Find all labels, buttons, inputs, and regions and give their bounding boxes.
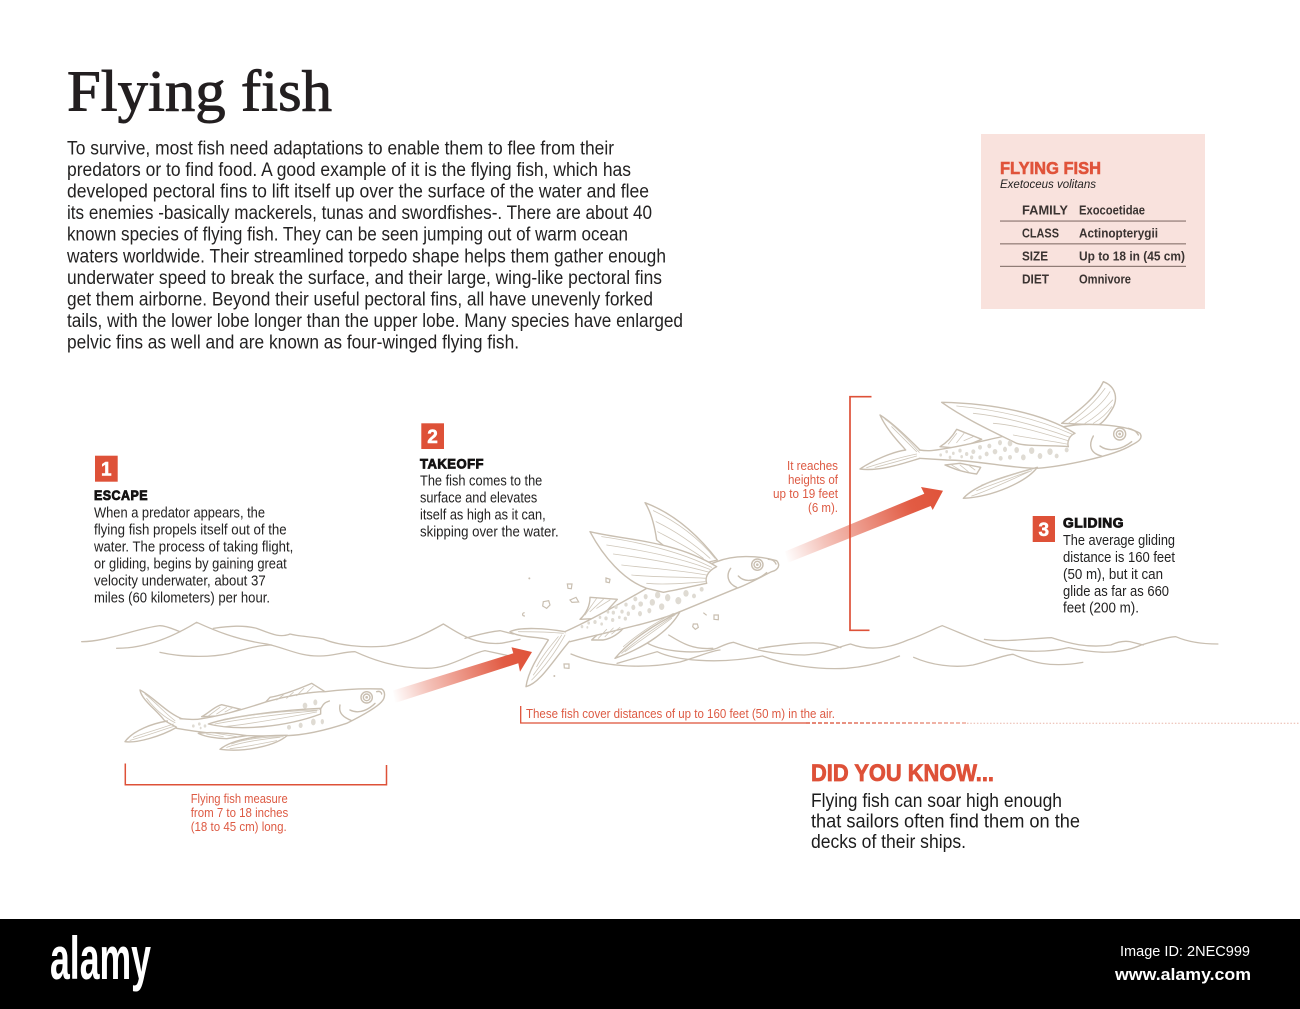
title: Flying fish: [67, 58, 332, 124]
tail fin: [125, 690, 183, 742]
height label: up to 19 feet: [773, 486, 838, 501]
escape description: or gliding, begins by gaining great: [94, 556, 287, 572]
scale spots: [581, 587, 704, 629]
pelvic fin: [615, 612, 680, 658]
water droplets: [523, 577, 718, 677]
fact table: SIZE: [1022, 249, 1048, 263]
escape description: miles (60 kilometers) per hour.: [94, 590, 270, 606]
footer bar: [0, 919, 1300, 1009]
step 1: escape: [93, 456, 293, 606]
intro text block: tails, with the lower lobe longer than the upper lobe. Many species have enlarged: [67, 311, 683, 332]
escape description: velocity underwater, about 37: [94, 573, 266, 589]
callout heading: DID YOU KNOW...: [811, 760, 994, 787]
website: www.alamy.com: [1114, 966, 1251, 984]
main wing: [942, 402, 1075, 447]
callout text: that sailors often find them on the: [811, 810, 1080, 832]
distance line and label: These fish cover distances of up to 160 feet (50 m) in the air.: [526, 706, 835, 721]
fact table: Actinopterygii: [1079, 226, 1158, 240]
intro text block: predators or to find food. A good example of it is the flying fish, which has: [67, 160, 631, 181]
fact table: CLASS: [1022, 226, 1059, 240]
panel: species fact card: [981, 134, 1205, 309]
main wing: [590, 532, 717, 592]
card heading: FLYING FISH: [1000, 158, 1101, 178]
head details: [1091, 428, 1138, 456]
gliding description: glide as far as 660: [1063, 584, 1169, 600]
gliding description: [1063, 533, 1175, 617]
length bracket: [125, 764, 387, 785]
callout text: Flying fish can soar high enough: [811, 790, 1062, 812]
intro text block: [66, 138, 683, 354]
intro text block: its enemies -basically mackerels, tunas and swordfishes-. There are about 40: [67, 203, 652, 224]
gliding description: (50 m), but it can: [1063, 567, 1163, 583]
number badge 3: [1033, 516, 1055, 542]
eye: [361, 692, 372, 703]
intro text block: underwater speed to break the surface, and their large, wing-like pectoral fins: [67, 268, 662, 289]
scale spots: [939, 440, 1069, 461]
intro text block: To survive, most fish need adaptations to enable them to flee from their: [67, 138, 615, 159]
dorsal and anal fins: [940, 429, 982, 474]
head details: [728, 559, 776, 587]
eye: [1114, 428, 1126, 440]
height label: [773, 458, 838, 515]
upper wing: [1062, 382, 1115, 425]
heading escape: ESCAPE: [94, 488, 148, 503]
heading takeoff: TAKEOFF: [420, 457, 484, 472]
height bracket: [850, 397, 872, 630]
tail fin: [510, 629, 570, 687]
head details: [320, 691, 382, 721]
step 2: takeoff: [420, 423, 559, 541]
height label: (6 m).: [808, 500, 838, 515]
fact table: Exocoetidae: [1079, 203, 1145, 217]
fin rays: [867, 388, 1113, 496]
distance line and label: [521, 706, 1300, 723]
fin rays: [518, 511, 715, 680]
fact table: FAMILY: [1022, 203, 1069, 217]
length label: (18 to 45 cm) long.: [191, 819, 287, 834]
takeoff description: [420, 474, 559, 541]
number badge 1: [95, 456, 118, 482]
gliding description: The average gliding: [1063, 533, 1175, 549]
escape description: water. The process of taking flight,: [93, 539, 293, 555]
escape description: When a predator appears, the: [94, 505, 265, 521]
callout text: decks of their ships.: [811, 831, 966, 853]
length label: [191, 791, 289, 834]
upper wing: [645, 503, 717, 567]
eye: [752, 559, 763, 570]
intro text block: get them airborne. Beyond their useful pectoral fins, all have unevenly forked: [67, 290, 653, 310]
fact table: Up to 18 in (45 cm): [1079, 249, 1185, 263]
fish: gliding in the air: [860, 382, 1141, 498]
number badge 3: 3: [1039, 520, 1049, 541]
image id: Image ID: 2NEC999: [1120, 944, 1250, 960]
intro text block: pelvic fins as well and are known as four-winged flying fish.: [67, 333, 519, 354]
waves: [82, 622, 1218, 669]
callout text: [811, 790, 1080, 853]
escape description: [93, 505, 293, 606]
arrow: escape to takeoff: [393, 647, 532, 703]
fact table: Omnivore: [1079, 272, 1131, 286]
intro text block: waters worldwide. Their streamlined torpedo shape helps them gather enough: [66, 246, 666, 267]
number badge 2: 2: [427, 427, 438, 448]
pectoral fin: [208, 708, 321, 728]
dorsal and anal fins: [580, 597, 625, 640]
fin rays: [130, 686, 318, 749]
number badge 1: 1: [101, 460, 112, 480]
intro text block: known species of flying fish. They can be seen jumping out of warm ocean: [67, 225, 628, 246]
scale spots: [192, 699, 324, 730]
tail fin: [860, 415, 920, 470]
step 3: gliding: [1033, 516, 1175, 617]
height label: It reaches: [787, 458, 838, 473]
pelvic fin: [963, 467, 1037, 498]
fish: takeoff, breaking the surface: [510, 503, 779, 687]
height label: heights of: [788, 472, 838, 487]
takeoff description: surface and elevates: [420, 491, 537, 507]
body: [565, 557, 779, 642]
gliding description: distance is 160 feet: [1063, 550, 1175, 566]
heading gliding: GLIDING: [1063, 516, 1124, 531]
arrow: takeoff to gliding: [785, 487, 943, 563]
fish: escape, swimming underwater: [125, 683, 385, 750]
intro text block: developed pectoral fins to lift itself up over the surface of the water and flee: [67, 182, 649, 202]
fact table: DIET: [1022, 272, 1049, 286]
lower fins: [198, 733, 287, 750]
length label: from 7 to 18 inches: [191, 805, 289, 820]
takeoff description: skipping over the water.: [420, 525, 559, 541]
gliding description: feet (200 m).: [1063, 601, 1139, 617]
fact table: [1000, 203, 1186, 286]
body: [919, 424, 1141, 468]
escape description: flying fish propels itself out of the: [94, 522, 287, 538]
footer logo: alamy: [50, 925, 151, 992]
scientific name: Exetoceus volitans: [1000, 177, 1096, 191]
takeoff description: itself as high as it can,: [420, 508, 546, 524]
takeoff description: The fish comes to the: [420, 474, 542, 490]
dorsal fins: [202, 683, 325, 717]
body: [177, 689, 385, 736]
callout: did you know: [811, 760, 1080, 853]
length label: Flying fish measure: [191, 791, 288, 806]
